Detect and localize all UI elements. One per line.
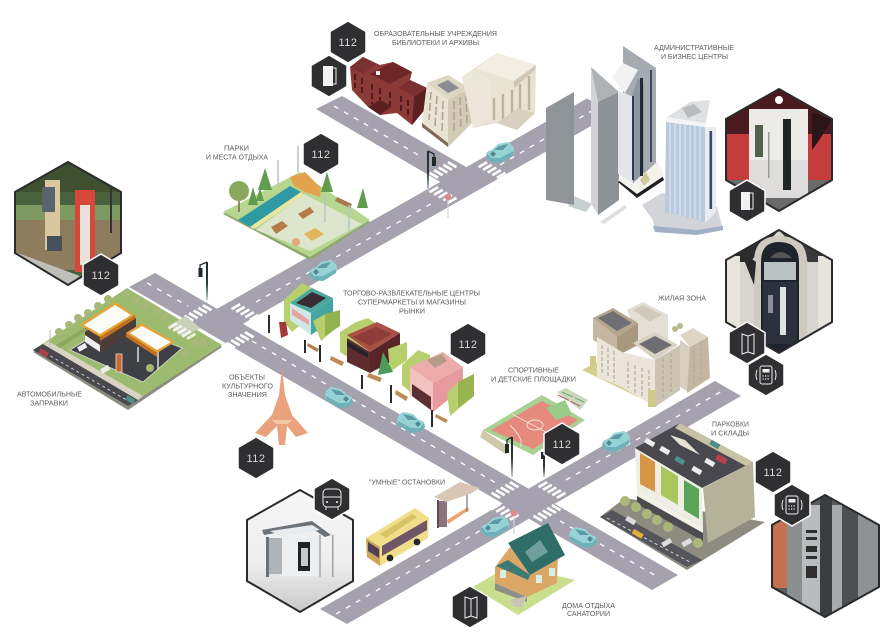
label: holiday homes: ДОМА ОТДЫХА (562, 601, 615, 610)
badge: culture 112 (238, 437, 274, 479)
photo hexagon: smart bus stop (247, 490, 353, 612)
label: parks: ПАРКИ (224, 144, 249, 152)
badge: parking 112: 112 (763, 467, 783, 479)
label: shopping centers: СУПЕРМАРКЕТЫ И МАГАЗИНЫ (358, 298, 466, 306)
building: bus shelter (434, 482, 480, 528)
badge: admin door icon (729, 180, 765, 222)
building: cream museum (462, 53, 536, 130)
road network (129, 96, 741, 624)
photo hexagon: arched residential door (726, 230, 832, 353)
building: shop teal (268, 283, 340, 362)
building: park (223, 146, 370, 260)
label: educational institutions: БИБЛИОТЕКИ И АРХИВЫ (392, 38, 479, 47)
label: holiday homes: САНАТОРИИ (567, 609, 610, 618)
badge: gas station 112 (83, 254, 119, 296)
badge: sports 112 (544, 423, 580, 465)
badge: residential intercom icon (748, 354, 784, 396)
photo hexagon: red wall door (726, 89, 832, 211)
bus (366, 508, 429, 566)
building: gas station (33, 288, 222, 410)
badge: bus icon (314, 478, 350, 520)
label: cultural sites: ОБЪЕКТЫ (229, 372, 265, 382)
label: parks: И МЕСТА ОТДЫХА (206, 152, 268, 162)
building: shop pink (390, 350, 474, 427)
badge: parking intercom icon (774, 484, 810, 526)
label: cultural sites: КУЛЬТУРНОГО (222, 382, 273, 390)
label: cultural sites: ЗНАЧЕНИЯ (228, 390, 267, 399)
badge: education door icon (311, 55, 347, 97)
building: blue glass tower (642, 100, 723, 235)
traffic lights and signs (198, 151, 545, 534)
photo hexagon: intercom panel (772, 495, 879, 617)
cars (309, 142, 630, 548)
label: parking and warehouses: И СКЛАДЫ (711, 428, 749, 438)
badge: parking 112 (755, 451, 791, 493)
badge: residential door icon (729, 322, 765, 364)
label: gas stations: АВТОМОБИЛЬНЫЕ (17, 390, 82, 398)
label: shopping centers: ТОРГОВО-РАЗВЛЕКАТЕЛЬНЫЕ ЦЕНТРЫ (343, 288, 480, 298)
label: shopping centers: РЫНКИ (399, 306, 425, 316)
building: office tower with spire (591, 67, 627, 224)
label: educational institutions: ОБРАЗОВАТЕЛЬНЫЕ УЧРЕЖДЕНИЯ (374, 29, 497, 38)
label: sports grounds: СПОРТИВНЫЕ (508, 366, 559, 374)
building: cream library (422, 75, 473, 147)
label: administrative and business centers: АДМИНИСТРАТИВНЫЕ (654, 43, 734, 52)
building: shop brown (330, 318, 407, 389)
crosswalks (184, 162, 566, 521)
label: residential zone: ЖИЛАЯ ЗОНА (658, 294, 706, 302)
label: parking and warehouses: ПАРКОВКИ (712, 420, 749, 428)
badge: parks 112 (303, 133, 339, 175)
label: sports grounds: И ДЕТСКИЕ ПЛОЩАДКИ (491, 374, 576, 384)
badge: gas station 112: 112 (91, 270, 111, 282)
badge: shops 112 (450, 323, 486, 365)
badge: education 112: 112 (338, 37, 358, 49)
building: Eiffel tower (255, 368, 308, 445)
badge: parks 112: 112 (311, 149, 331, 161)
building: multi-storey parking (600, 423, 765, 570)
building: holiday house (473, 523, 575, 615)
building: residential zone (582, 302, 710, 407)
badge: sports 112: 112 (552, 439, 572, 451)
label: administrative and business centers: И БИЗНЕС ЦЕНТРЫ (661, 52, 728, 61)
building: business center (612, 46, 664, 198)
badge: education 112 (330, 21, 366, 63)
building: sports ground (480, 388, 588, 455)
building: office tower slab (546, 92, 592, 212)
badge: holiday house door icon (452, 586, 488, 628)
label: gas stations: ЗАПРАВКИ (30, 398, 68, 408)
photo hexagon: park kiosk (15, 162, 121, 285)
badge: culture 112: 112 (246, 453, 266, 465)
building: red educational institution (350, 57, 427, 125)
label: smart stops: "УМНЫЕ" ОСТАНОВКИ (369, 478, 445, 486)
badge: shops 112: 112 (458, 339, 478, 351)
